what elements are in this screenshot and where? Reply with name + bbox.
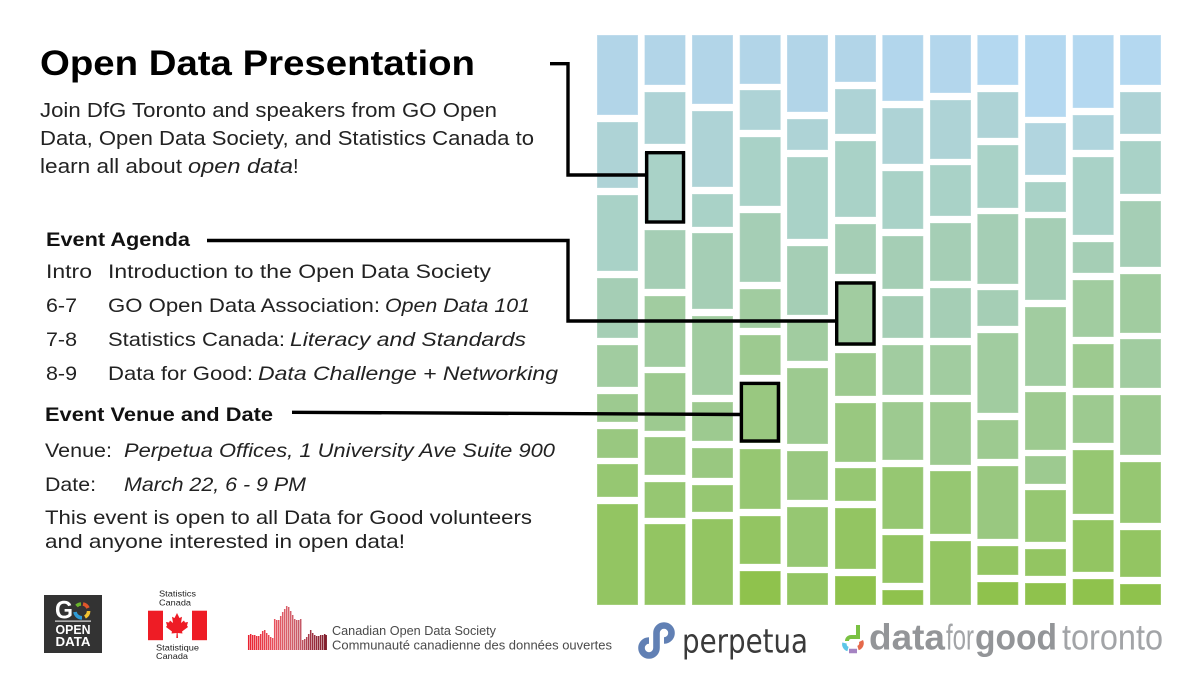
- column 1: [597, 35, 638, 605]
- intro text block: Data, Open Data Society, and Statistics Canada to: [40, 128, 534, 150]
- venue and date details: [45, 440, 555, 496]
- closing note: and anyone interested in open data!: [45, 531, 405, 553]
- logo: GO Open Data: G: [55, 596, 73, 624]
- logo: data for good toronto: data: [869, 616, 946, 657]
- agenda list: Data for Good:: [108, 363, 253, 385]
- intro text block: !: [293, 156, 299, 178]
- agenda list: 7-8: [46, 329, 77, 351]
- agenda list: Data Challenge + Networking: [258, 363, 558, 385]
- column 4: [740, 35, 781, 605]
- closing note: [45, 507, 532, 553]
- logo: Canadian Open Data Society: Communauté canadienne des données ouvertes: [332, 638, 612, 652]
- column 12: [1120, 35, 1161, 605]
- agenda list: Statistics Canada:: [108, 329, 285, 351]
- logo: data for good toronto: for: [946, 616, 974, 657]
- logo: Statistics Canada: [148, 588, 207, 661]
- agenda list: Intro: [46, 261, 92, 283]
- chart: mosaic of stacked tiles: [597, 35, 1161, 605]
- column 6: [835, 35, 876, 605]
- column 2: [644, 35, 686, 605]
- logo: Statistics Canada: Statistique: [156, 642, 199, 652]
- agenda list: [46, 261, 558, 385]
- column 7: [882, 35, 923, 605]
- closing note: This event is open to all Data for Good volunteers: [45, 507, 532, 529]
- agenda list: Literacy and Standards: [290, 329, 526, 351]
- agenda list: GO Open Data Association:: [108, 295, 380, 317]
- connector arrow: title to tile: [550, 64, 684, 222]
- intro text block: [40, 100, 534, 178]
- column 9: [977, 35, 1018, 605]
- logo: Canadian Open Data Society: Canadian Open Data Society: [332, 624, 497, 638]
- agenda list: 8-9: [46, 363, 77, 385]
- logo: data for good toronto: [844, 616, 1163, 657]
- venue and date details: March 22, 6 - 9 PM: [124, 474, 307, 496]
- logo: GO Open Data: OPEN: [56, 623, 90, 637]
- venue and date details: Perpetua Offices, 1 University Ave Suite 900: [124, 440, 555, 462]
- agenda list: 6-7: [46, 295, 77, 317]
- logo: GO Open Data: [44, 595, 102, 653]
- venue and date details: Date:: [45, 474, 96, 496]
- heading: event venue and date: Event Venue and Date: [45, 405, 273, 426]
- column 10: [1025, 35, 1066, 605]
- intro text block: learn all about: [40, 156, 182, 178]
- logo: GO Open Data: DATA: [56, 635, 90, 649]
- logo: data for good toronto: toronto: [1062, 616, 1163, 657]
- venue and date details: Venue:: [45, 440, 112, 462]
- title: Open Data Presentation: [40, 44, 475, 83]
- logo: perpetua: perpetua: [682, 622, 808, 661]
- logo: Statistics Canada: Canada: [156, 651, 188, 661]
- column 5: [787, 35, 828, 605]
- logo: Statistics Canada: Canada: [159, 598, 191, 608]
- logo: Canadian Open Data Society: [249, 606, 612, 652]
- connector arrow: agenda to tile: [207, 240, 874, 344]
- logo: perpetua: [642, 622, 808, 661]
- heading: event agenda: Event Agenda: [46, 230, 190, 251]
- intro text block: open data: [188, 156, 293, 178]
- agenda list: Introduction to the Open Data Society: [108, 261, 491, 283]
- logo: Statistics Canada: Statistics: [159, 588, 196, 598]
- column 3: [692, 35, 733, 605]
- agenda list: Open Data 101: [385, 295, 530, 317]
- column 8: [930, 35, 971, 605]
- logo: data for good toronto: good: [975, 616, 1057, 657]
- connector arrow: venue to tile: [292, 383, 778, 441]
- intro text block: Join DfG Toronto and speakers from GO Open: [40, 100, 497, 122]
- column 11: [1073, 35, 1114, 605]
